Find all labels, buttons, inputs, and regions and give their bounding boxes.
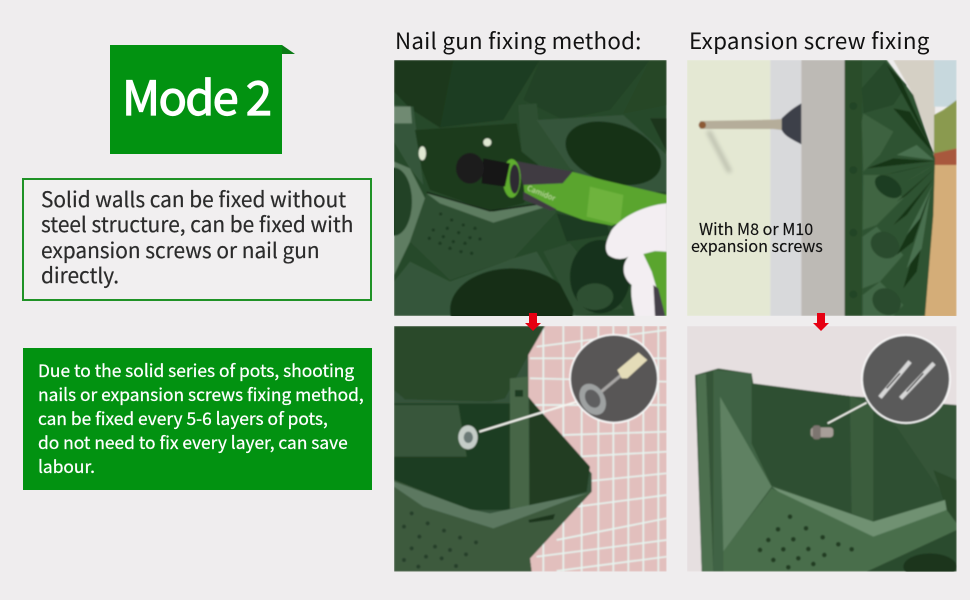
photo: nail gun on pots [394,60,667,316]
photo: expansion bolt detail [687,326,957,580]
green description box: can be fixed every 5-6 layers of pots, [38,405,328,430]
green description box: labour. [38,453,95,478]
nail gun body: Camidor [526,183,557,204]
caption: M8 or M10: expansion screws [691,233,823,257]
outlined description box: directly. [41,260,119,290]
outlined description box: Solid walls can be fixed without [41,184,346,214]
green description box: Due to the solid series of pots, shooting [38,357,354,382]
nail gun body [456,153,667,226]
heading: nail gun: Nail gun fixing method: [395,24,642,56]
gun handle [643,251,667,316]
badge: Mode 2 [110,45,295,154]
photo: expansion screw on wall [687,60,957,321]
caption: M8 or M10: With M8 or M10 [699,216,813,240]
green description box [23,348,372,490]
outlined description box [23,179,371,300]
badge: Mode 2: Mode 2 [122,60,270,129]
glove [606,203,667,316]
heading: expansion screw: Expansion screw fixing [689,24,930,56]
green description box: do not need to fix every layer, can save [38,429,348,454]
green description box: nails or expansion screws fixing method, [38,381,364,406]
photo: nail detail [394,326,667,572]
arrow: right column [813,313,829,331]
arrow: left column [525,313,541,331]
outlined description box: expansion screws or nail gun [41,235,320,265]
outlined description box: steel structure, can be fixed with [41,209,353,239]
